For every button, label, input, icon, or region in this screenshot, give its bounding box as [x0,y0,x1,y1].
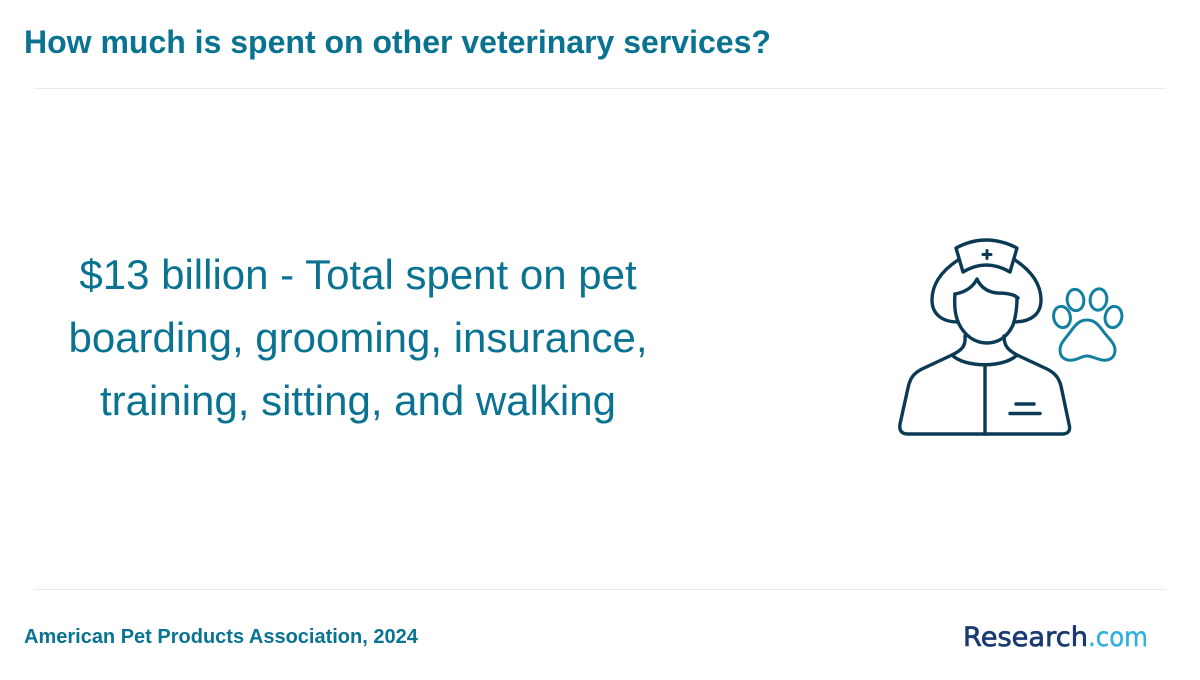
main statistic text [68,251,648,424]
logo: Research [963,622,1088,653]
icon: nurse [900,240,1070,434]
icon: paw [1052,288,1124,360]
main statistic text: $13 billion - Total spent on pet [79,251,637,298]
main statistic text: training, sitting, and walking [100,377,616,424]
source: American Pet Products Association, 2024 [24,626,418,648]
title: How much is spent on other veterinary services? [24,24,771,60]
logo: .com [1088,622,1148,653]
main statistic text: boarding, grooming, insurance, [68,314,648,361]
